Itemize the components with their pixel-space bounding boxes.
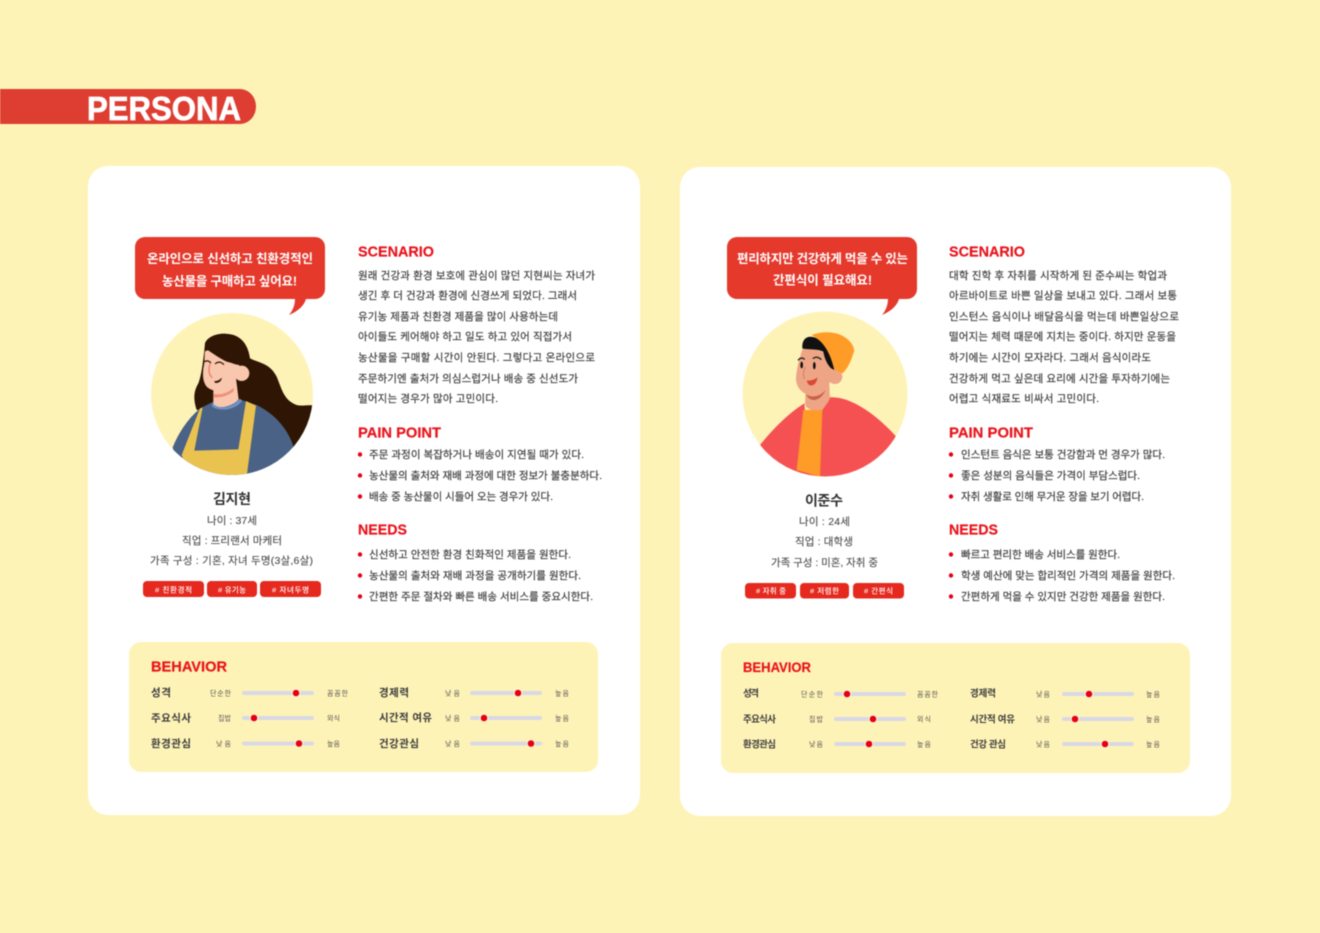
panel: behavior sliders: 높음 <box>555 740 570 748</box>
needs section: NEEDS <box>949 521 998 538</box>
scenario section: 떨어지는 체력 때문에 지치는 중이다. 하지만 운동을 <box>949 330 1176 343</box>
pain point section: 농산물의 출처와 재배 과정에 대한 정보가 불충분하다. <box>369 469 602 482</box>
panel: behavior sliders <box>129 642 598 772</box>
needs section: 간편하게 먹을 수 있지만 건강한 제품을 원한다. <box>961 590 1165 603</box>
icon: man avatar <box>742 312 908 477</box>
needs section: NEEDS <box>358 521 407 538</box>
pain point section: 좋은 성분의 음식들은 가격이 부담스럽다. <box>961 469 1140 482</box>
panel: behavior sliders: 높음 <box>1146 715 1161 723</box>
scenario section: 생긴 후 더 건강과 환경에 신경쓰게 되었다. 그래서 <box>358 289 577 302</box>
title banner: PERSONA: PERSONA <box>87 90 241 127</box>
panel: behavior sliders: 높음 <box>917 740 932 748</box>
speech bubble <box>727 237 917 315</box>
scenario section: 어렵고 식재료도 비싸서 고민이다. <box>949 392 1099 405</box>
panel: behavior sliders <box>721 643 1190 773</box>
speech bubble: 편리하지만 건강하게 먹을 수 있는 <box>737 252 908 266</box>
scenario section: 건강하게 먹고 싶은데 요리에 시간을 투자하기에는 <box>949 372 1170 385</box>
speech bubble: 농산물을 구매하고 싶어요! <box>162 273 297 288</box>
icon: woman avatar <box>151 313 316 477</box>
needs section <box>358 521 593 603</box>
panel: behavior sliders: 집밥 <box>218 713 232 722</box>
name and profile text: 김지현 <box>213 491 251 507</box>
panel: behavior sliders: 외식 <box>917 714 931 723</box>
panel: behavior sliders: 낮음 <box>445 713 461 722</box>
name and profile text: 직업 : 대학생 <box>795 535 853 548</box>
panel: behavior sliders: 경제력 <box>379 686 409 699</box>
hashtag chips: # 유기농 <box>218 585 246 594</box>
panel: behavior sliders: 성격 <box>743 688 759 699</box>
panel: behavior sliders: 단순한 <box>210 688 232 697</box>
scenario section: 아이들도 케어해야 하고 일도 하고 있어 직접가서 <box>358 330 572 343</box>
panel: behavior sliders: 성격 <box>151 686 171 699</box>
name and profile text: 나이 : 37세 <box>207 515 257 527</box>
panel: behavior sliders: 시간적 여유 <box>379 711 432 724</box>
name and profile text <box>771 492 878 569</box>
panel: behavior sliders: 경제력 <box>970 687 996 699</box>
pain point section: 인스턴트 음식은 보통 건강함과 먼 경우가 많다. <box>961 448 1165 461</box>
panel: behavior sliders: 낮음 <box>445 739 461 748</box>
scenario section: 떨어지는 경우가 많아 고민이다. <box>358 392 498 405</box>
hashtag chips <box>745 583 904 598</box>
panel: behavior sliders: 꼼꼼한 <box>917 690 939 698</box>
scenario section: 주문하기엔 출처가 의심스럽거나 배송 중 신선도가 <box>358 372 578 385</box>
needs section <box>949 521 1175 603</box>
scenario section: 아르바이트로 바쁜 일상을 보내고 있다. 그래서 보통 <box>949 289 1177 302</box>
scenario section: 하기에는 시간이 모자라다. 그래서 음식이라도 <box>949 351 1151 364</box>
panel: behavior sliders: 꼼꼼한 <box>327 689 349 697</box>
panel: persona card Kim Ji-hyeon <box>88 166 640 815</box>
speech bubble <box>135 237 325 315</box>
pain point section: PAIN POINT <box>358 424 441 441</box>
panel: behavior sliders: 단순한 <box>801 689 824 698</box>
needs section: 학생 예산에 맞는 합리적인 가격의 제품을 원한다. <box>961 569 1175 582</box>
needs section: 신선하고 안전한 환경 친화적인 제품을 원한다. <box>369 548 571 561</box>
scenario section: SCENARIO <box>358 243 434 260</box>
panel: behavior sliders: 환경관심 <box>743 738 776 750</box>
panel: behavior sliders: 높음 <box>555 714 570 722</box>
pain point section: PAIN POINT <box>949 424 1033 441</box>
scenario section: 농산물을 구매할 시간이 안된다. 그렇다고 온라인으로 <box>358 351 595 364</box>
pain point section: 자취 생활로 인해 무거운 장을 보기 어렵다. <box>961 490 1144 503</box>
scenario section: 인스턴스 음식이나 배달음식을 먹는데 바쁜일상으로 <box>949 310 1179 323</box>
panel: behavior sliders: 높음 <box>327 740 341 748</box>
hashtag chips: # 간편식 <box>864 585 893 595</box>
name and profile text: 직업 : 프리랜서 마케터 <box>182 534 282 547</box>
hashtag chips: # 친환경적 <box>155 584 192 594</box>
hashtag chips: # 저렴한 <box>810 585 839 595</box>
panel: behavior sliders: BEHAVIOR <box>151 658 227 675</box>
pain point section: 배송 중 농산물이 시들어 오는 경우가 있다. <box>369 490 553 503</box>
panel: behavior sliders: 낮음 <box>216 739 232 748</box>
panel: behavior sliders: 시간적 여유 <box>970 713 1015 725</box>
speech bubble: 온라인으로 신선하고 친환경적인 <box>147 252 313 266</box>
panel: behavior sliders: 환경관심 <box>151 737 191 750</box>
panel: behavior sliders: 주요식사 <box>151 711 191 724</box>
panel: persona card Lee Jun-su <box>680 167 1231 816</box>
name and profile text: 이준수 <box>805 492 843 508</box>
scenario section: SCENARIO <box>949 243 1025 260</box>
scenario section: 대학 진학 후 자취를 시작하게 된 준수씨는 학업과 <box>949 269 1167 282</box>
name and profile text: 나이 : 24세 <box>799 516 850 528</box>
scenario section <box>358 243 595 405</box>
panel: behavior sliders: 낮음 <box>445 688 461 697</box>
pain point section: 주문 과정이 복잡하거나 배송이 지연될 때가 있다. <box>369 448 584 461</box>
panel: behavior sliders: 높음 <box>555 689 570 697</box>
needs section: 농산물의 출처와 재배 과정을 공개하기를 원한다. <box>369 569 581 582</box>
panel: behavior sliders: 낮음 <box>1036 689 1051 698</box>
panel: behavior sliders: BEHAVIOR <box>743 659 811 675</box>
pain point section <box>358 424 602 503</box>
name and profile text <box>150 491 313 567</box>
pain point section <box>949 424 1165 503</box>
panel: behavior sliders: 외식 <box>327 713 340 722</box>
speech bubble: 간편식이 필요해요! <box>773 272 872 287</box>
panel: behavior sliders: 건강 관심 <box>970 738 1006 750</box>
scenario section: 유기농 제품과 친환경 제품을 많이 사용하는데 <box>358 310 558 323</box>
panel: behavior sliders: 낮음 <box>809 739 824 748</box>
hashtag chips: # 자녀두명 <box>272 584 309 594</box>
hashtag chips <box>143 581 321 597</box>
panel: behavior sliders: 낮음 <box>1036 739 1051 748</box>
scenario section <box>949 243 1179 405</box>
panel: behavior sliders: 낮음 <box>1036 714 1051 723</box>
name and profile text: 가족 구성 : 기혼, 자녀 두명(3살,6살) <box>150 554 313 567</box>
needs section: 빠르고 편리한 배송 서비스를 원한다. <box>961 548 1120 561</box>
panel: behavior sliders: 주요식사 <box>743 713 776 725</box>
name and profile text: 가족 구성 : 미혼, 자취 중 <box>771 556 878 569</box>
panel: behavior sliders: 높음 <box>1146 690 1161 698</box>
panel: behavior sliders: 높음 <box>1146 740 1161 748</box>
hashtag chips: # 자취 중 <box>756 586 786 595</box>
panel: behavior sliders: 집밥 <box>809 714 824 723</box>
scenario section: 원래 건강과 환경 보호에 관심이 많던 지현씨는 자녀가 <box>358 269 595 282</box>
needs section: 간편한 주문 절차와 빠른 배송 서비스를 중요시한다. <box>369 590 593 603</box>
title banner: PERSONA <box>0 89 256 127</box>
panel: behavior sliders: 건강관심 <box>379 737 419 750</box>
